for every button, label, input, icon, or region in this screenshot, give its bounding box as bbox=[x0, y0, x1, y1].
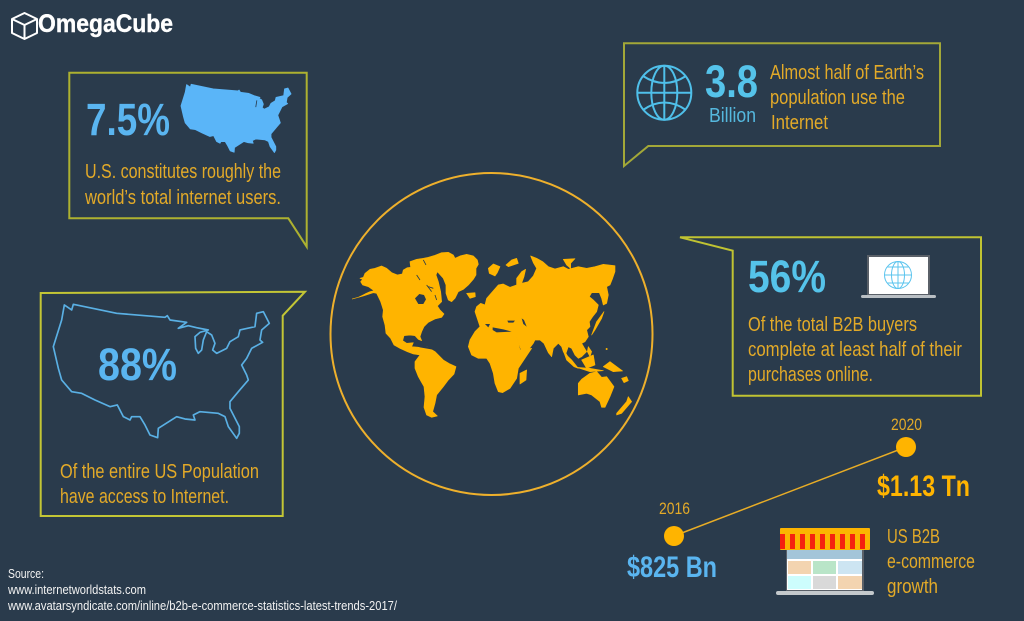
speech bubble outline bbox=[41, 292, 305, 516]
panel: 88% US access bbox=[41, 292, 305, 516]
circle outline bbox=[330, 173, 652, 495]
logo: OmegaCube bbox=[12, 10, 173, 39]
description: world’s total internet users. bbox=[84, 187, 281, 209]
description: Of the entire US Population bbox=[60, 461, 259, 483]
value: $1.13 Tn: $1.13 Tn bbox=[877, 470, 970, 503]
point: 2016: 2016 bbox=[659, 499, 690, 518]
speech bubble outline bbox=[69, 73, 307, 247]
point: 2020 bbox=[891, 415, 922, 457]
caption: US B2B bbox=[887, 526, 940, 548]
logo wordmark: OmegaCube bbox=[38, 10, 173, 38]
caption: growth bbox=[887, 576, 938, 598]
source list bbox=[7, 567, 397, 613]
statistic: 56%: 56% bbox=[748, 251, 826, 302]
icon: filled US map bbox=[181, 84, 291, 153]
statistic: 88%: 88% bbox=[98, 339, 177, 390]
speech bubble outline bbox=[624, 43, 940, 166]
panel: 56% B2B buyers bbox=[680, 237, 981, 396]
point: 2020: 2020 bbox=[891, 415, 922, 434]
value: $825 Bn: $825 Bn bbox=[627, 551, 717, 584]
description: Of the total B2B buyers bbox=[748, 314, 917, 336]
statistic: 3.8: 3.8 bbox=[705, 56, 758, 107]
statistic: 7.5%: 7.5% bbox=[86, 94, 170, 145]
source list: www.internetworldstats.com bbox=[7, 583, 146, 597]
US map outline bbox=[53, 304, 269, 438]
trend line bbox=[674, 447, 906, 536]
icon: storefront laptop bbox=[776, 528, 874, 595]
panel: 3.8 billion bbox=[624, 43, 940, 166]
description bbox=[770, 62, 924, 134]
world map bbox=[352, 252, 632, 417]
source list: www.avatarsyndicate.com/inline/b2b-e-commerce-statistics-latest-trends-2017/ bbox=[7, 599, 397, 613]
description bbox=[60, 461, 259, 508]
caption: e-commerce bbox=[887, 551, 975, 573]
icon: globe bbox=[637, 66, 691, 120]
description: U.S. constitutes roughly the bbox=[85, 161, 281, 183]
description: purchases online. bbox=[748, 364, 873, 386]
chart: US B2B e-commerce growth bbox=[627, 415, 975, 598]
unit: Billion: Billion bbox=[709, 105, 756, 127]
description: have access to Internet. bbox=[60, 486, 229, 508]
description: population use the bbox=[770, 87, 905, 109]
point: 2016 bbox=[659, 499, 690, 546]
panel: 7.5% US share bbox=[69, 73, 307, 247]
description: complete at least half of their bbox=[748, 339, 962, 361]
icon: cube bbox=[12, 13, 37, 39]
speech bubble outline bbox=[680, 237, 981, 396]
description bbox=[84, 161, 281, 209]
caption bbox=[887, 526, 975, 598]
globe circle with world map bbox=[330, 173, 652, 495]
icon: laptop with globe bbox=[861, 255, 936, 298]
description bbox=[748, 314, 962, 386]
source list: Source: bbox=[8, 567, 44, 581]
description: Internet bbox=[771, 112, 828, 134]
description: Almost half of Earth’s bbox=[770, 62, 924, 84]
